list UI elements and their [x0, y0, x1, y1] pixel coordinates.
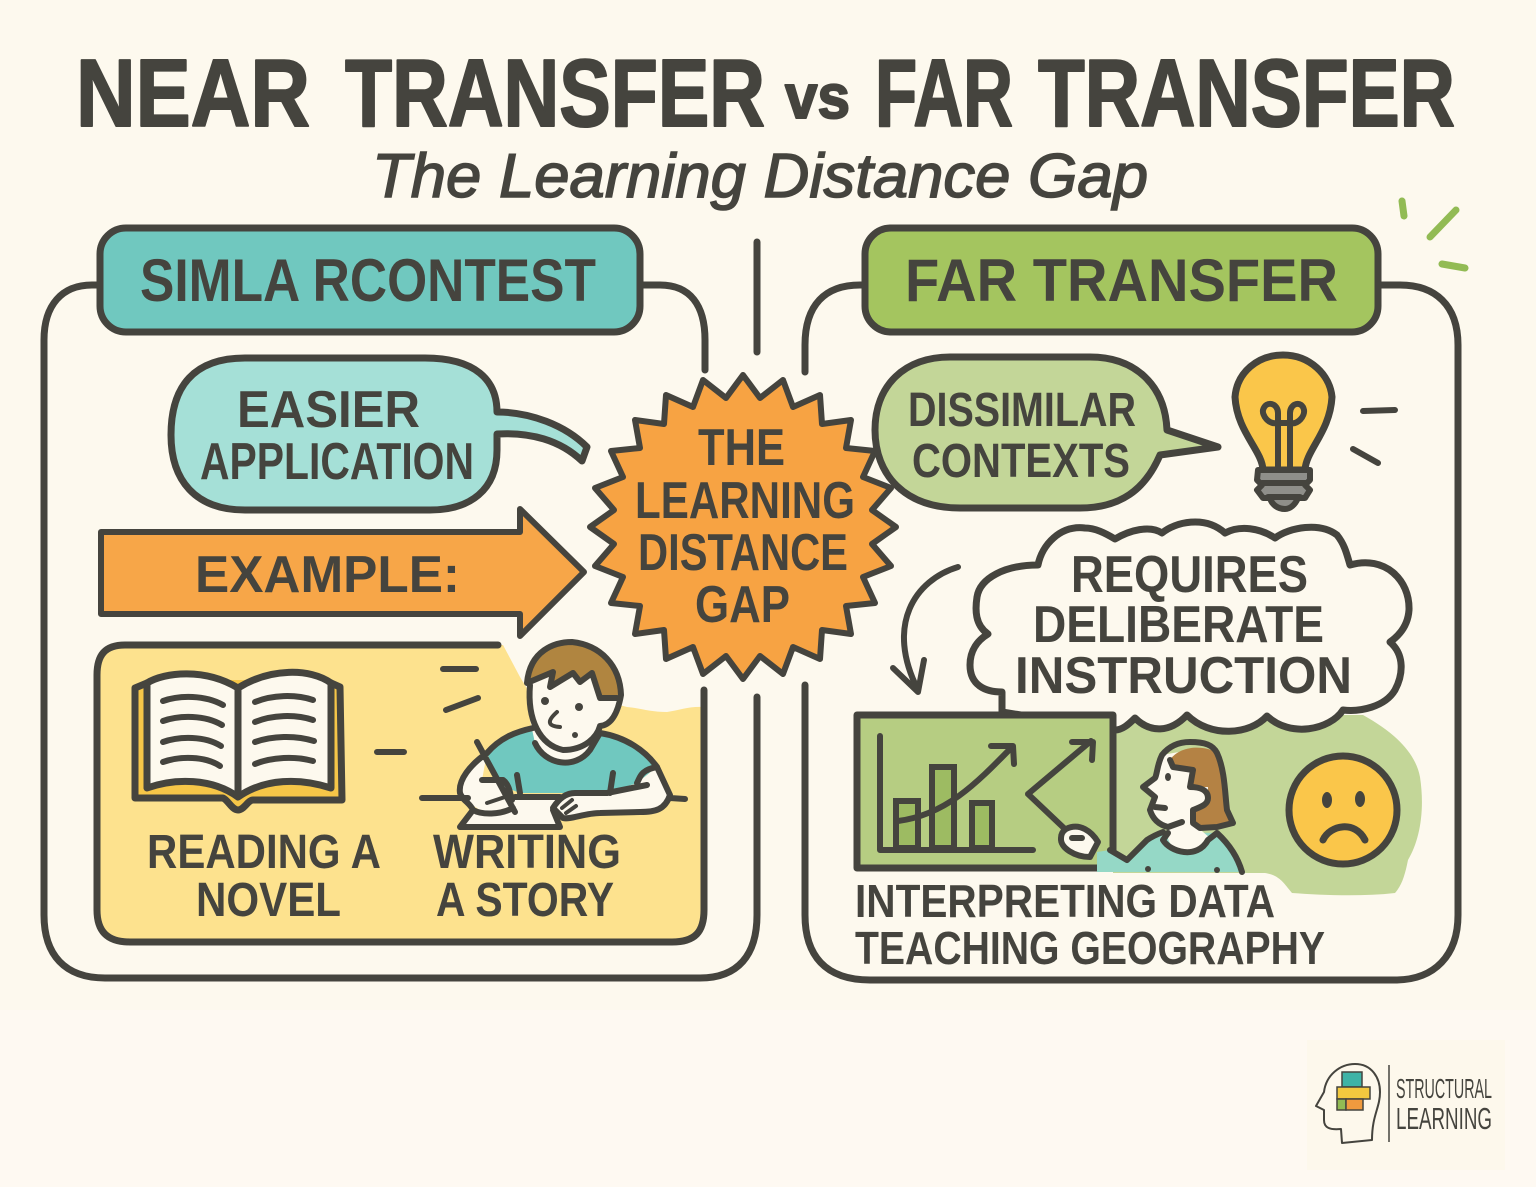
motion dashes: [377, 669, 478, 752]
speech bubble: easier application: EASIER: [237, 381, 420, 439]
icon: head with blocks: [1316, 1064, 1380, 1143]
label: reading a novel: NOVEL: [196, 874, 341, 927]
starburst: the learning distance gap: DISTANCE: [638, 524, 848, 582]
speech bubble: dissimilar contexts: DISSIMILAR: [908, 384, 1136, 437]
title: [76, 40, 1455, 147]
sparks: [1402, 201, 1465, 268]
panel outline: right: [805, 285, 1458, 980]
pointer arrow: [1028, 741, 1093, 830]
label: writing a story: WRITING: [433, 826, 621, 879]
panel outline: left: [44, 285, 757, 978]
label: reading a novel: [147, 826, 381, 927]
label: writing a story: [433, 826, 621, 927]
starburst: the learning distance gap: GAP: [695, 576, 790, 634]
curved arrow: [893, 567, 958, 692]
title: TRANSFER: [345, 40, 765, 147]
icon: sad face: [1289, 756, 1397, 864]
icon: light bulb: [1235, 355, 1332, 509]
panel: far transfer: [805, 201, 1465, 980]
logo: structural learning: [1307, 1040, 1505, 1170]
arrow: example: EXAMPLE:: [195, 546, 460, 604]
speech bubble: easier application: APPLICATION: [200, 433, 474, 491]
thought cloud: requires deliberate instruction: DELIBERATE: [1033, 596, 1324, 654]
speech bubble: dissimilar contexts: CONTEXTS: [912, 435, 1130, 488]
speech bubble: easier application: [171, 358, 587, 510]
thought cloud: requires deliberate instruction: REQUIRES: [1071, 546, 1308, 604]
arrow: example: [101, 509, 584, 636]
panel header: right: [865, 228, 1378, 332]
label: interpreting data, teaching geography: INTERPRETING DATA: [855, 875, 1275, 927]
panel: near transfer: [44, 228, 757, 978]
starburst: the learning distance gap: LEARNING: [635, 472, 855, 530]
bar chart: [880, 736, 1033, 850]
center divider: [754, 242, 760, 352]
thought cloud: requires deliberate instruction: [970, 522, 1409, 731]
title: NEAR: [76, 40, 310, 147]
title: FAR: [875, 40, 1013, 147]
panel header: right: FAR TRANSFER: [905, 247, 1338, 314]
bulb rays: [1353, 410, 1395, 463]
speech bubble: dissimilar contexts: [875, 357, 1218, 508]
subtitle: The Learning Distance Gap: [372, 142, 1148, 211]
chart board: [857, 715, 1113, 868]
icon: open book: [135, 672, 342, 810]
title: vs: [785, 63, 850, 132]
label: reading a novel: READING A: [147, 826, 381, 879]
panel header: left: [100, 228, 640, 332]
panel header: left: SIMLA RCONTEST: [140, 247, 596, 314]
starburst: the learning distance gap: [590, 375, 896, 679]
example box: [97, 642, 704, 942]
label: writing a story: A STORY: [436, 874, 614, 927]
figure: woman teaching: [1061, 742, 1242, 873]
label: interpreting data, teaching geography: TEACHING GEOGRAPHY: [855, 922, 1325, 974]
starburst: the learning distance gap: THE: [698, 419, 785, 477]
figure: boy writing: [422, 642, 685, 827]
green backdrop: [1113, 715, 1422, 895]
label: interpreting data, teaching geography: [855, 875, 1325, 974]
thought cloud: requires deliberate instruction: INSTRUCTION: [1015, 647, 1352, 705]
